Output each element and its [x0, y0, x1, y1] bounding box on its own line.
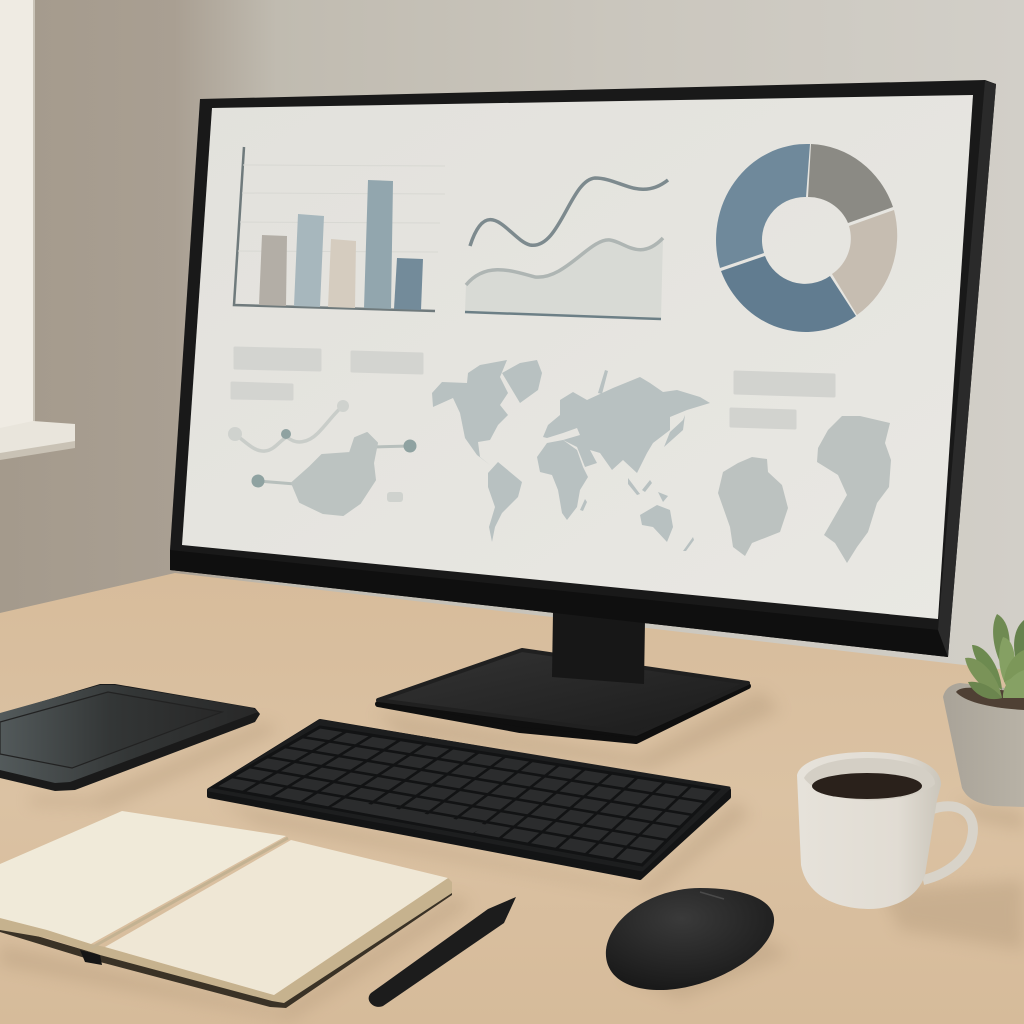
- bar chart: [234, 147, 445, 311]
- notebook cover: [0, 884, 452, 1008]
- line chart: [470, 178, 668, 246]
- notebook spine: [91, 838, 288, 948]
- placeholder labels left: [232, 348, 422, 399]
- cup inner: [804, 758, 935, 800]
- region map centre right: [718, 457, 788, 556]
- mouse: [606, 888, 774, 990]
- africa: [537, 440, 588, 520]
- coffee cup: [797, 752, 973, 909]
- keyboard: [209, 721, 729, 878]
- keys: [214, 727, 718, 865]
- monitor body: [170, 80, 996, 657]
- succulent: [965, 614, 1024, 699]
- monitor stand base: [378, 650, 748, 741]
- islands: [580, 370, 694, 551]
- wall: [0, 0, 1024, 700]
- space bar: [331, 800, 488, 833]
- monitor screen: [182, 95, 973, 619]
- plant pot: [943, 614, 1024, 807]
- keyboard body: [209, 721, 729, 878]
- cup body: [797, 752, 941, 909]
- placeholder labels right: [731, 372, 834, 428]
- australia: [640, 505, 673, 542]
- monitor stand neck: [552, 612, 645, 684]
- cup handle: [923, 806, 973, 880]
- connected dots chart: [228, 400, 416, 502]
- desk surface: [0, 573, 1024, 1024]
- monitor: [170, 80, 996, 741]
- notebook edges: [0, 878, 452, 1003]
- area chart: [465, 238, 663, 319]
- north america: [432, 360, 508, 465]
- region map left: [292, 433, 377, 515]
- pen: [369, 897, 516, 1007]
- left page: [0, 811, 286, 944]
- donut chart: [716, 144, 897, 332]
- world map: [432, 360, 710, 551]
- notebook: [0, 811, 452, 1008]
- right page: [105, 840, 448, 995]
- window light: [0, 0, 75, 460]
- eurasia: [543, 377, 710, 473]
- desk shadows: [0, 690, 1024, 1020]
- tablet: [0, 684, 260, 791]
- south america: [488, 462, 522, 542]
- greenland: [502, 360, 542, 403]
- region map far right: [817, 416, 891, 563]
